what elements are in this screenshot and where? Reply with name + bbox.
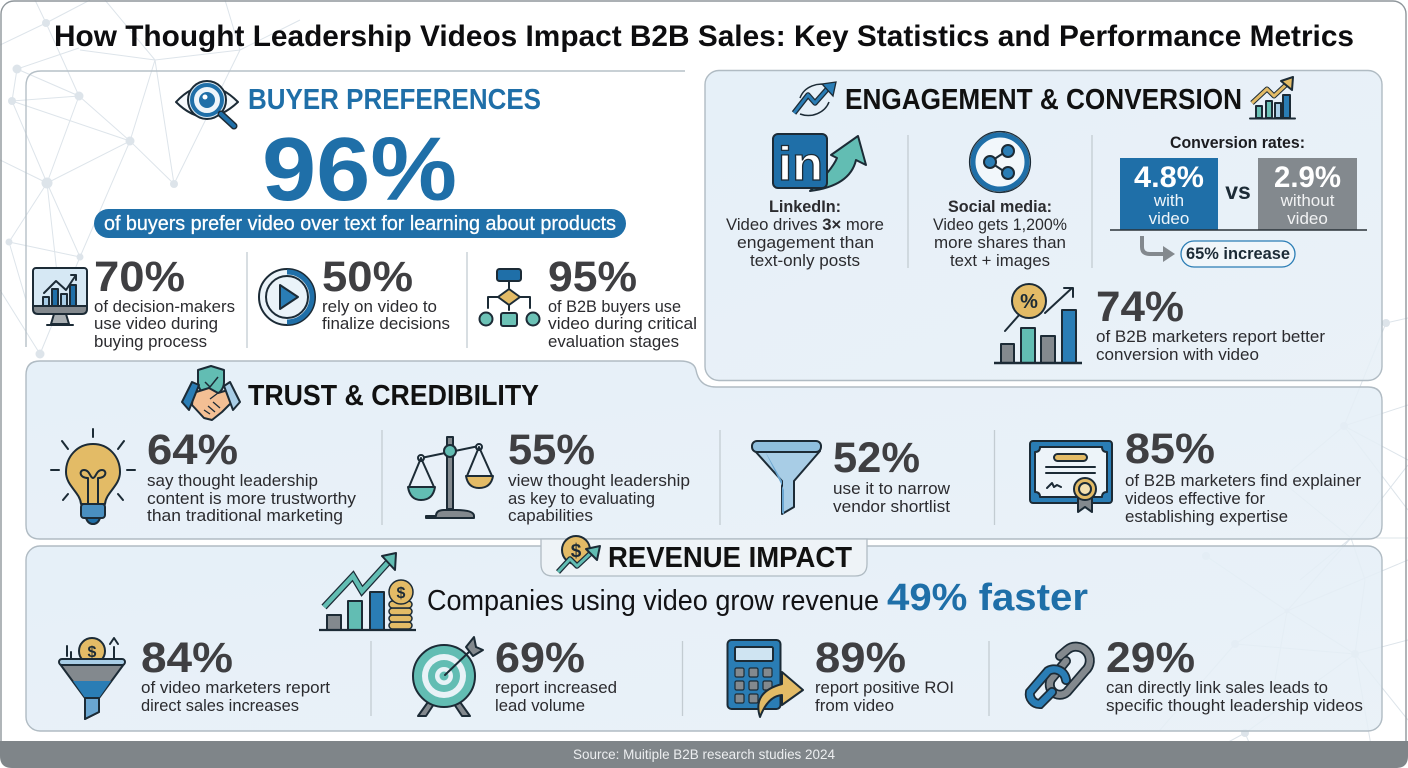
stat: 95%: video during critical <box>548 314 697 333</box>
title: How Thought Leadership Videos Impact B2B Sales: Key Statistics and Performance Metrics <box>54 20 1354 53</box>
stat: 64% <box>51 426 357 525</box>
stat: 85%: of B2B marketers find explainer <box>1125 471 1361 490</box>
stat: 84%: direct sales increases <box>141 696 299 715</box>
icon: chain link <box>1030 647 1090 704</box>
social media block: more shares than <box>934 233 1066 252</box>
linkedin block: engagement than <box>737 233 874 252</box>
stat: 55%: view thought leadership <box>508 471 690 490</box>
stat: 50%: finalize decisions <box>322 314 450 333</box>
stat: 85%: establishing expertise <box>1125 507 1288 526</box>
without video box: 2.9% <box>1274 161 1341 194</box>
icon: circular trend arrow <box>794 82 836 115</box>
icon: flowchart <box>480 269 540 326</box>
icon: handshake with shield <box>182 366 240 420</box>
with video box: video <box>1149 209 1189 228</box>
stat: 70% <box>33 253 235 351</box>
stat: 95%: of B2B buyers use <box>548 297 681 316</box>
stat: 52% <box>752 434 951 516</box>
stat: 64%: 64% <box>147 426 238 474</box>
social media block: text + images <box>950 251 1050 270</box>
icon: light bulb <box>51 429 135 524</box>
footer source bar <box>0 741 1408 768</box>
icon: monitor chart <box>33 268 87 325</box>
vs label: vs <box>1225 178 1251 204</box>
stat: 69%: report increased <box>495 678 617 697</box>
with video box: with <box>1153 191 1184 210</box>
heading tab: REVENUE IMPACT <box>608 542 852 574</box>
footer source bar: Source: Muitiple B2B research studies 2024 <box>573 747 835 762</box>
heading tab <box>541 536 867 576</box>
stat: 74%: conversion with video <box>1096 345 1259 364</box>
icon: linkedin with arrow <box>773 134 866 191</box>
stat: 55% <box>408 426 690 525</box>
icon: play ring <box>259 269 315 325</box>
stat: 95% <box>480 253 697 351</box>
icon: calculator with arrow <box>728 640 803 717</box>
stat: 84%: 84% <box>141 634 233 682</box>
social media block: Video gets 1,200% <box>933 215 1067 234</box>
without video box: video <box>1287 209 1328 228</box>
stat: 69%: 69% <box>495 634 585 682</box>
icon: sales funnel <box>59 638 125 719</box>
stat: 64%: content is more trustworthy <box>147 489 357 508</box>
stat: 89%: from video <box>815 696 894 715</box>
icon: revenue chart with coins: $ <box>397 585 406 602</box>
icon: percent chart: % <box>1020 291 1038 313</box>
stat: 74% <box>994 283 1325 364</box>
icon: balance scales <box>408 437 493 518</box>
icon: percent chart <box>994 284 1082 363</box>
icon: sales funnel: $ <box>88 644 97 661</box>
arrow <box>1142 236 1175 262</box>
stat: 95%: evaluation stages <box>548 332 679 351</box>
stat: 50%: rely on video to <box>322 297 437 316</box>
without video box <box>1258 158 1357 230</box>
stat: 52%: 52% <box>833 434 920 482</box>
stat: 64%: say thought leadership <box>147 471 318 490</box>
stat: 29%: 29% <box>1106 634 1195 682</box>
icon: funnel <box>752 441 821 514</box>
stat: 70%: 70% <box>94 253 185 301</box>
heading: BUYER PREFERENCES <box>248 84 541 116</box>
heading: ENGAGEMENT & CONVERSION <box>845 84 1242 116</box>
headline: revenue growth <box>319 553 1088 630</box>
panel: buyer preferences <box>26 71 697 351</box>
with video box: 4.8% <box>1134 161 1204 194</box>
icon: eye and magnifier <box>176 81 238 126</box>
stat: 85%: videos effective for <box>1125 489 1265 508</box>
stat: 69%: lead volume <box>495 696 585 715</box>
heading: TRUST & CREDIBILITY <box>248 380 539 412</box>
stat: 29% <box>1030 634 1363 715</box>
stat: 52%: use it to narrow <box>833 479 951 498</box>
stat: 50% <box>259 253 450 333</box>
stat: 74%: 74% <box>1096 283 1184 331</box>
stat: 70%: of decision-makers <box>94 297 235 316</box>
pill callout: of buyers prefer video over text for learning about products <box>104 213 616 235</box>
stat: 50%: 50% <box>322 253 413 301</box>
headline: revenue growth: Companies using video grow revenue <box>427 585 879 617</box>
social media block: Social media: <box>948 197 1052 216</box>
with video box <box>1120 158 1218 230</box>
without video box: without <box>1280 191 1335 210</box>
social media block <box>933 132 1067 270</box>
linkedin block: text-only posts <box>750 251 860 270</box>
stat: 29%: specific thought leadership videos <box>1106 696 1363 715</box>
conversion rates comparison: Conversion rates: <box>1170 133 1305 152</box>
linkedin block <box>726 134 884 270</box>
stat: 29%: can directly link sales leads to <box>1106 678 1328 697</box>
increase pill <box>1181 241 1295 267</box>
stat: 69% <box>413 634 617 716</box>
stat: 64%: than traditional marketing <box>147 506 343 525</box>
icon: linkedin with arrow: in <box>778 137 823 190</box>
stat: 70%: buying process <box>94 332 207 351</box>
icon: coin with arrow: $ <box>571 541 582 562</box>
stat: 85% <box>1030 425 1361 526</box>
stat: 55%: as key to evaluating <box>508 489 655 508</box>
stat: 74%: of B2B marketers report better <box>1096 327 1325 346</box>
icon: coin with arrow <box>558 536 600 572</box>
stat: 84% <box>59 634 330 719</box>
conversion rates comparison <box>1110 133 1367 267</box>
panel: engagement and conversion <box>705 70 1382 380</box>
stat: 89% <box>728 634 954 717</box>
panel: revenue impact <box>26 536 1382 731</box>
stat: 55%: capabilities <box>508 506 593 525</box>
icon: certificate <box>1030 441 1112 512</box>
stat: 85%: 85% <box>1125 425 1215 473</box>
stat: 89%: 89% <box>815 634 906 682</box>
big stat 96%: 96% <box>262 120 457 220</box>
headline: revenue growth: 49% faster <box>887 577 1088 619</box>
stat: 84%: of video marketers report <box>141 678 330 697</box>
icon: growth chart <box>1250 77 1295 118</box>
icon: target with arrow <box>413 637 483 716</box>
linkedin block: LinkedIn: <box>769 197 841 216</box>
stat: 89%: report positive ROI <box>815 678 954 697</box>
linkedin block: Video drives 3× more <box>726 215 884 234</box>
stat: 70%: use video during <box>94 314 218 333</box>
stat: 95%: 95% <box>548 253 637 301</box>
stat: 55%: 55% <box>508 426 595 474</box>
stat: 52%: vendor shortlist <box>833 497 950 516</box>
icon: revenue chart with coins <box>319 553 416 630</box>
panel: trust and credibility <box>26 361 1382 539</box>
increase pill: 65% increase <box>1186 244 1290 263</box>
icon: share circle <box>970 132 1030 192</box>
